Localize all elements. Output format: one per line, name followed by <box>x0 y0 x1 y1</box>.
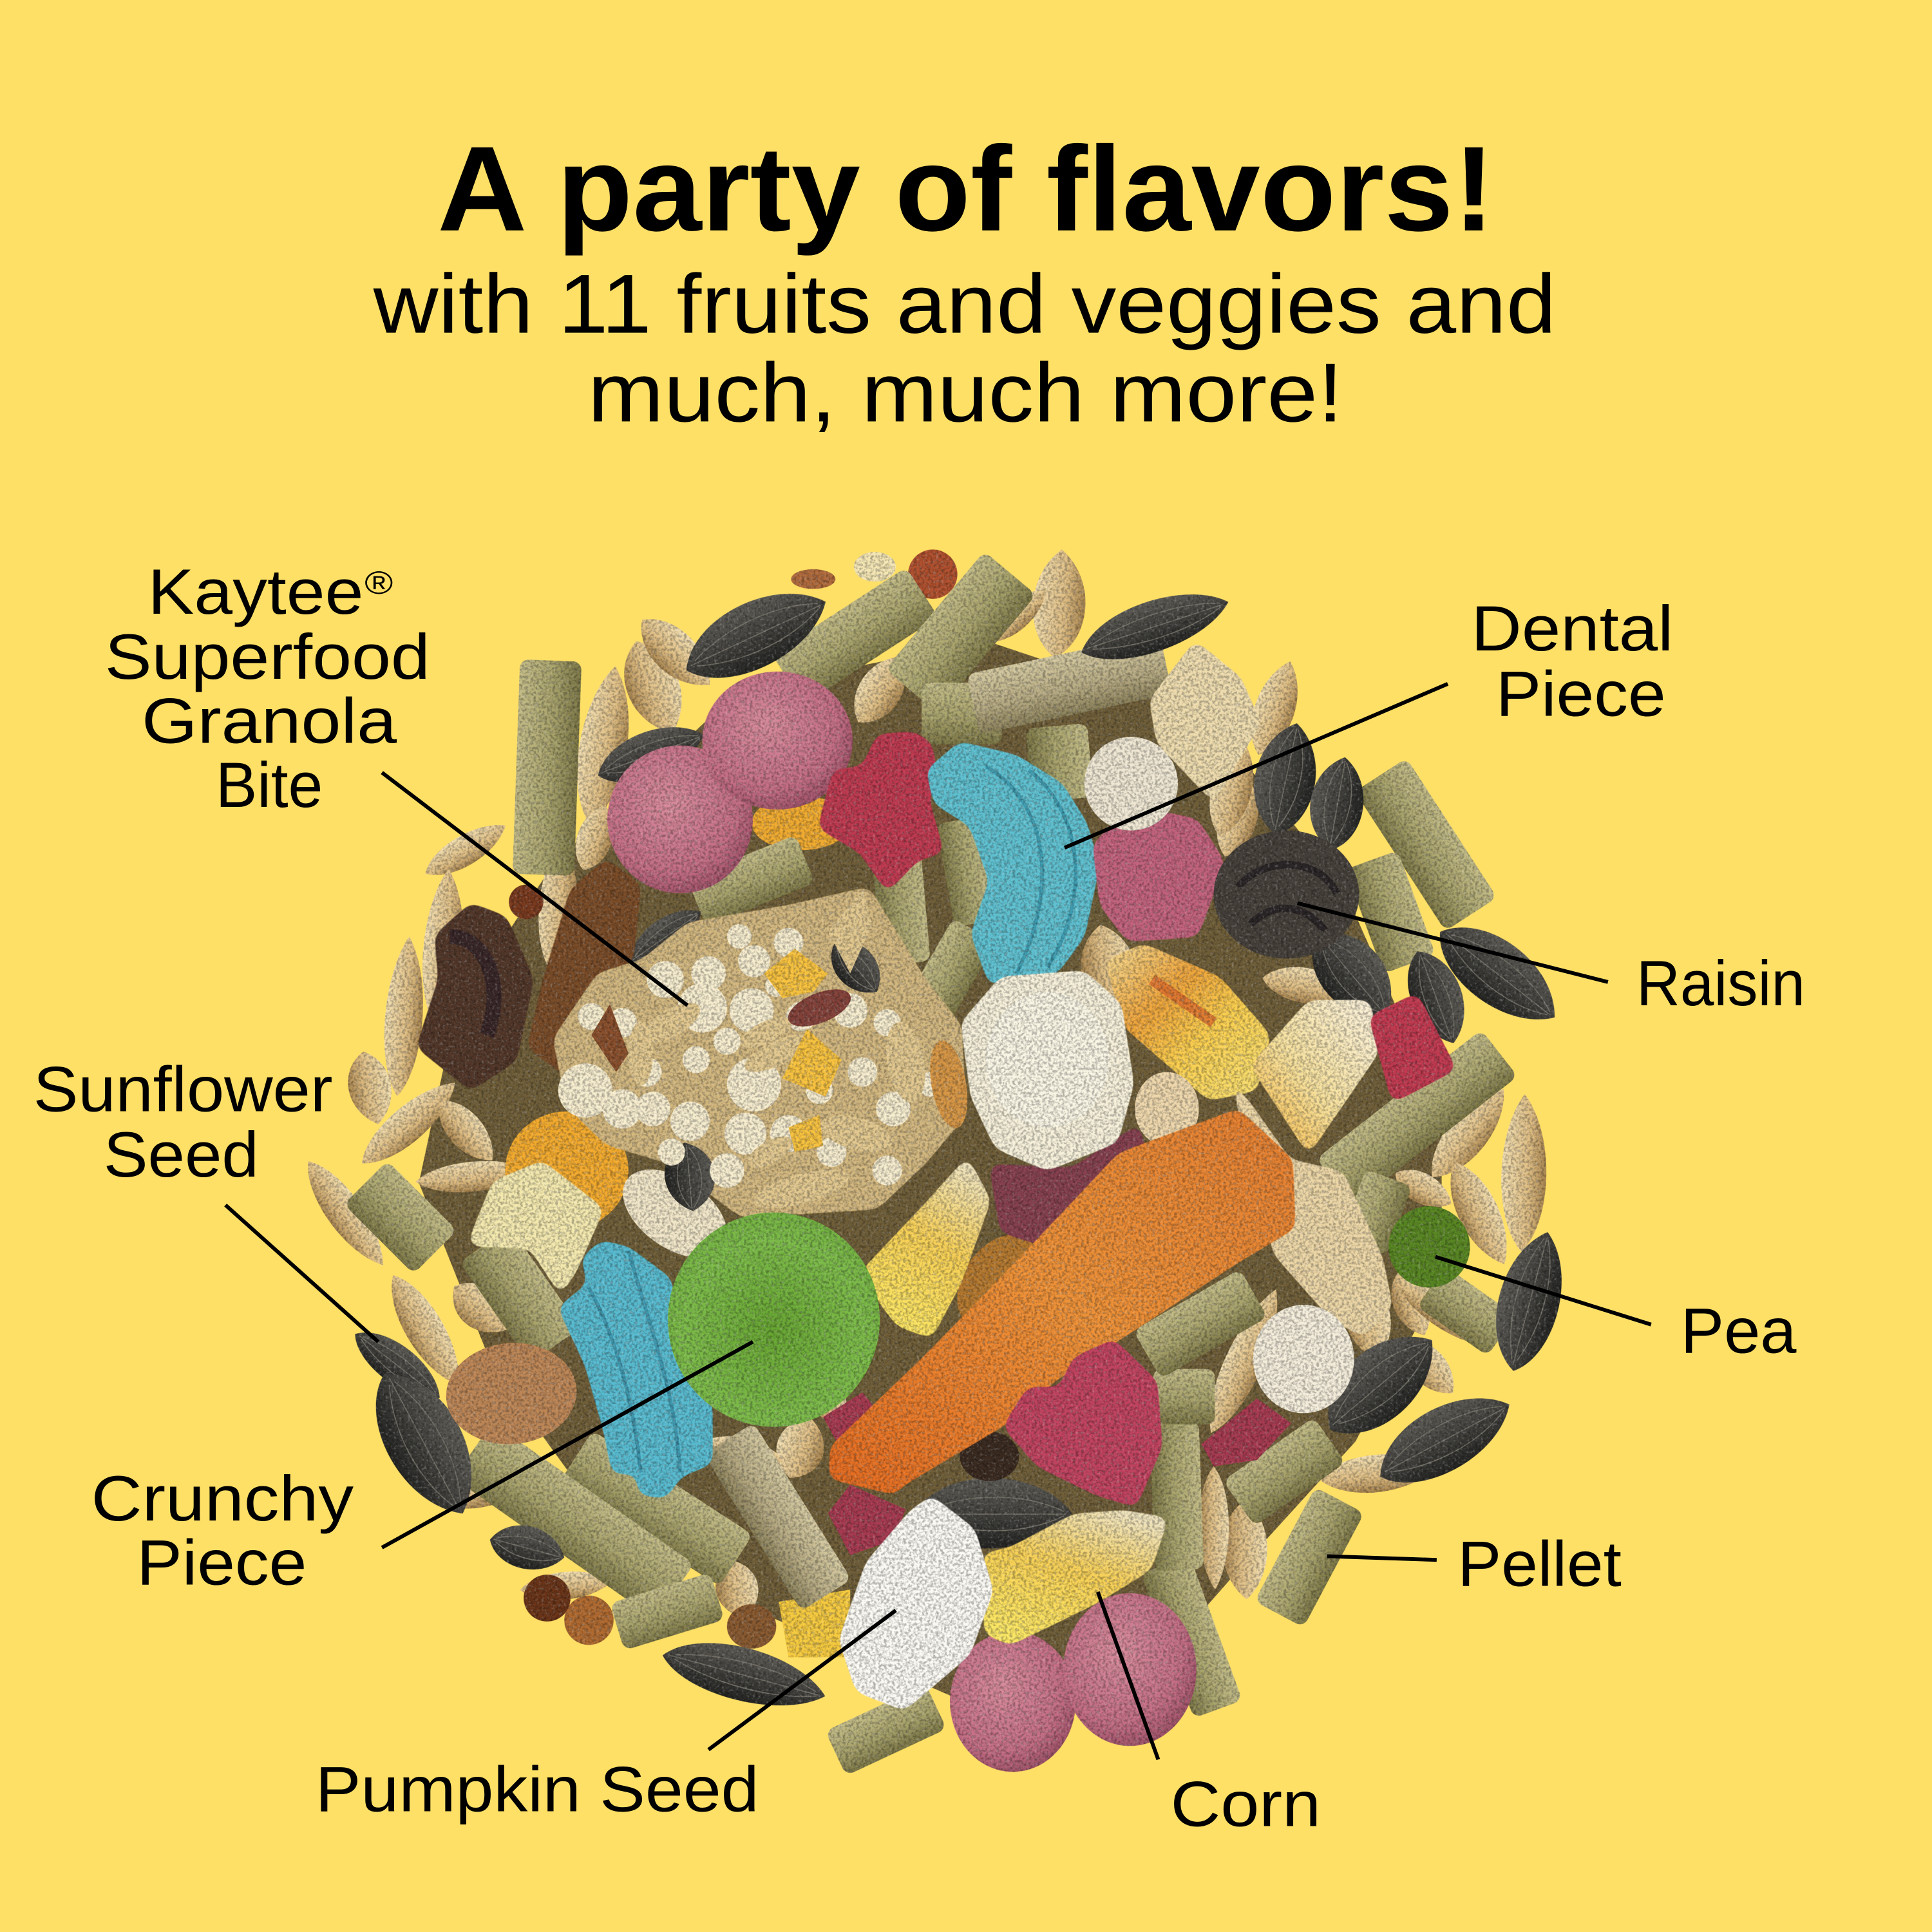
corn kernel, top right <box>1105 944 1271 1101</box>
tan pellets <box>703 633 1172 1611</box>
white bean <box>1253 1305 1354 1414</box>
tan pumpkin seed <box>1229 1074 1392 1337</box>
label: Kaytee Superfood Granola Bite <box>105 556 430 821</box>
pile shadow base <box>419 641 1442 1700</box>
label: Crunchy Piece: Piece <box>137 1527 307 1598</box>
label: Kaytee Superfood Granola Bite: Kaytee <box>148 556 363 628</box>
callout line: pellet <box>1327 1556 1437 1560</box>
corn kernel, white <box>1251 1001 1379 1155</box>
label: Raisin: Raisin <box>1636 948 1805 1019</box>
background corn pieces <box>505 549 1056 1657</box>
green pea <box>1388 1206 1470 1287</box>
label: Crunchy Piece: Crunchy <box>91 1463 354 1535</box>
label: Corn: Corn <box>1171 1768 1321 1840</box>
subtitle <box>373 257 1556 439</box>
pink bites <box>607 672 1197 1772</box>
orange carrot piece <box>829 1109 1295 1495</box>
raisin, right <box>1214 831 1359 959</box>
label: Dental Piece <box>1471 593 1673 730</box>
label: Kaytee Superfood Granola Bite: Superfood <box>105 621 430 693</box>
purple piece <box>1093 806 1225 942</box>
callout line: pea <box>1435 1257 1651 1325</box>
label: Kaytee Superfood Granola Bite: ® <box>365 565 393 601</box>
corn stub <box>1135 1072 1199 1146</box>
white pumpkin seed <box>839 1496 993 1710</box>
label: Sunflower Seed: Sunflower <box>33 1054 333 1126</box>
blue dental piece, top <box>927 742 1099 985</box>
apple chunk <box>468 1160 604 1295</box>
label: Dental Piece: Dental <box>1471 593 1673 665</box>
callout line: corn <box>1098 1592 1158 1759</box>
callout line: pumpkin <box>708 1611 896 1750</box>
sunflower seeds <box>345 572 1577 1722</box>
callout line: dental <box>1065 684 1448 848</box>
oats and grains <box>294 547 1549 1622</box>
label: Kaytee Superfood Granola Bite: Granola <box>142 686 397 757</box>
white soybean, top <box>1084 737 1178 831</box>
food pile <box>294 547 1577 1776</box>
label: Pellet: Pellet <box>1457 1528 1622 1600</box>
subtitle: much, much more! <box>588 345 1343 439</box>
label: Sunflower Seed <box>33 1054 333 1191</box>
label: Dental Piece: Piece <box>1496 659 1666 730</box>
label: Kaytee Superfood Granola Bite: Bite <box>216 750 323 821</box>
peanut <box>1150 641 1260 802</box>
subtitle: with 11 fruits and veggies and <box>373 257 1556 351</box>
green crunchy piece <box>668 1213 880 1427</box>
label: Sunflower Seed: Seed <box>104 1119 259 1191</box>
title: A party of flavors! <box>437 121 1495 256</box>
small dark raisin <box>960 1432 1019 1481</box>
corn kernel, centre <box>859 1157 990 1338</box>
label: Pea: Pea <box>1681 1296 1797 1367</box>
blue dental piece, lower <box>558 1241 712 1499</box>
almond <box>442 1338 581 1450</box>
pellets <box>344 551 1518 1776</box>
red heart piece <box>1003 1340 1162 1507</box>
callout line: crunchy <box>382 1342 753 1548</box>
label: Pumpkin Seed: Pumpkin Seed <box>316 1754 759 1825</box>
raisin, left <box>417 903 533 1090</box>
raisin, brown <box>527 859 641 1079</box>
red cube <box>1369 993 1456 1103</box>
granola bite <box>553 887 974 1217</box>
red star <box>818 732 944 892</box>
dark red pieces <box>823 1392 1291 1555</box>
white rice puff <box>961 971 1133 1171</box>
callout line: granola <box>382 773 688 1005</box>
callout line: sunflower <box>225 1205 378 1342</box>
callout line: raisin <box>1298 903 1608 982</box>
yellow corn, bottom <box>983 1511 1168 1645</box>
label: Crunchy Piece <box>91 1463 354 1598</box>
dark purple piece <box>989 1124 1148 1247</box>
